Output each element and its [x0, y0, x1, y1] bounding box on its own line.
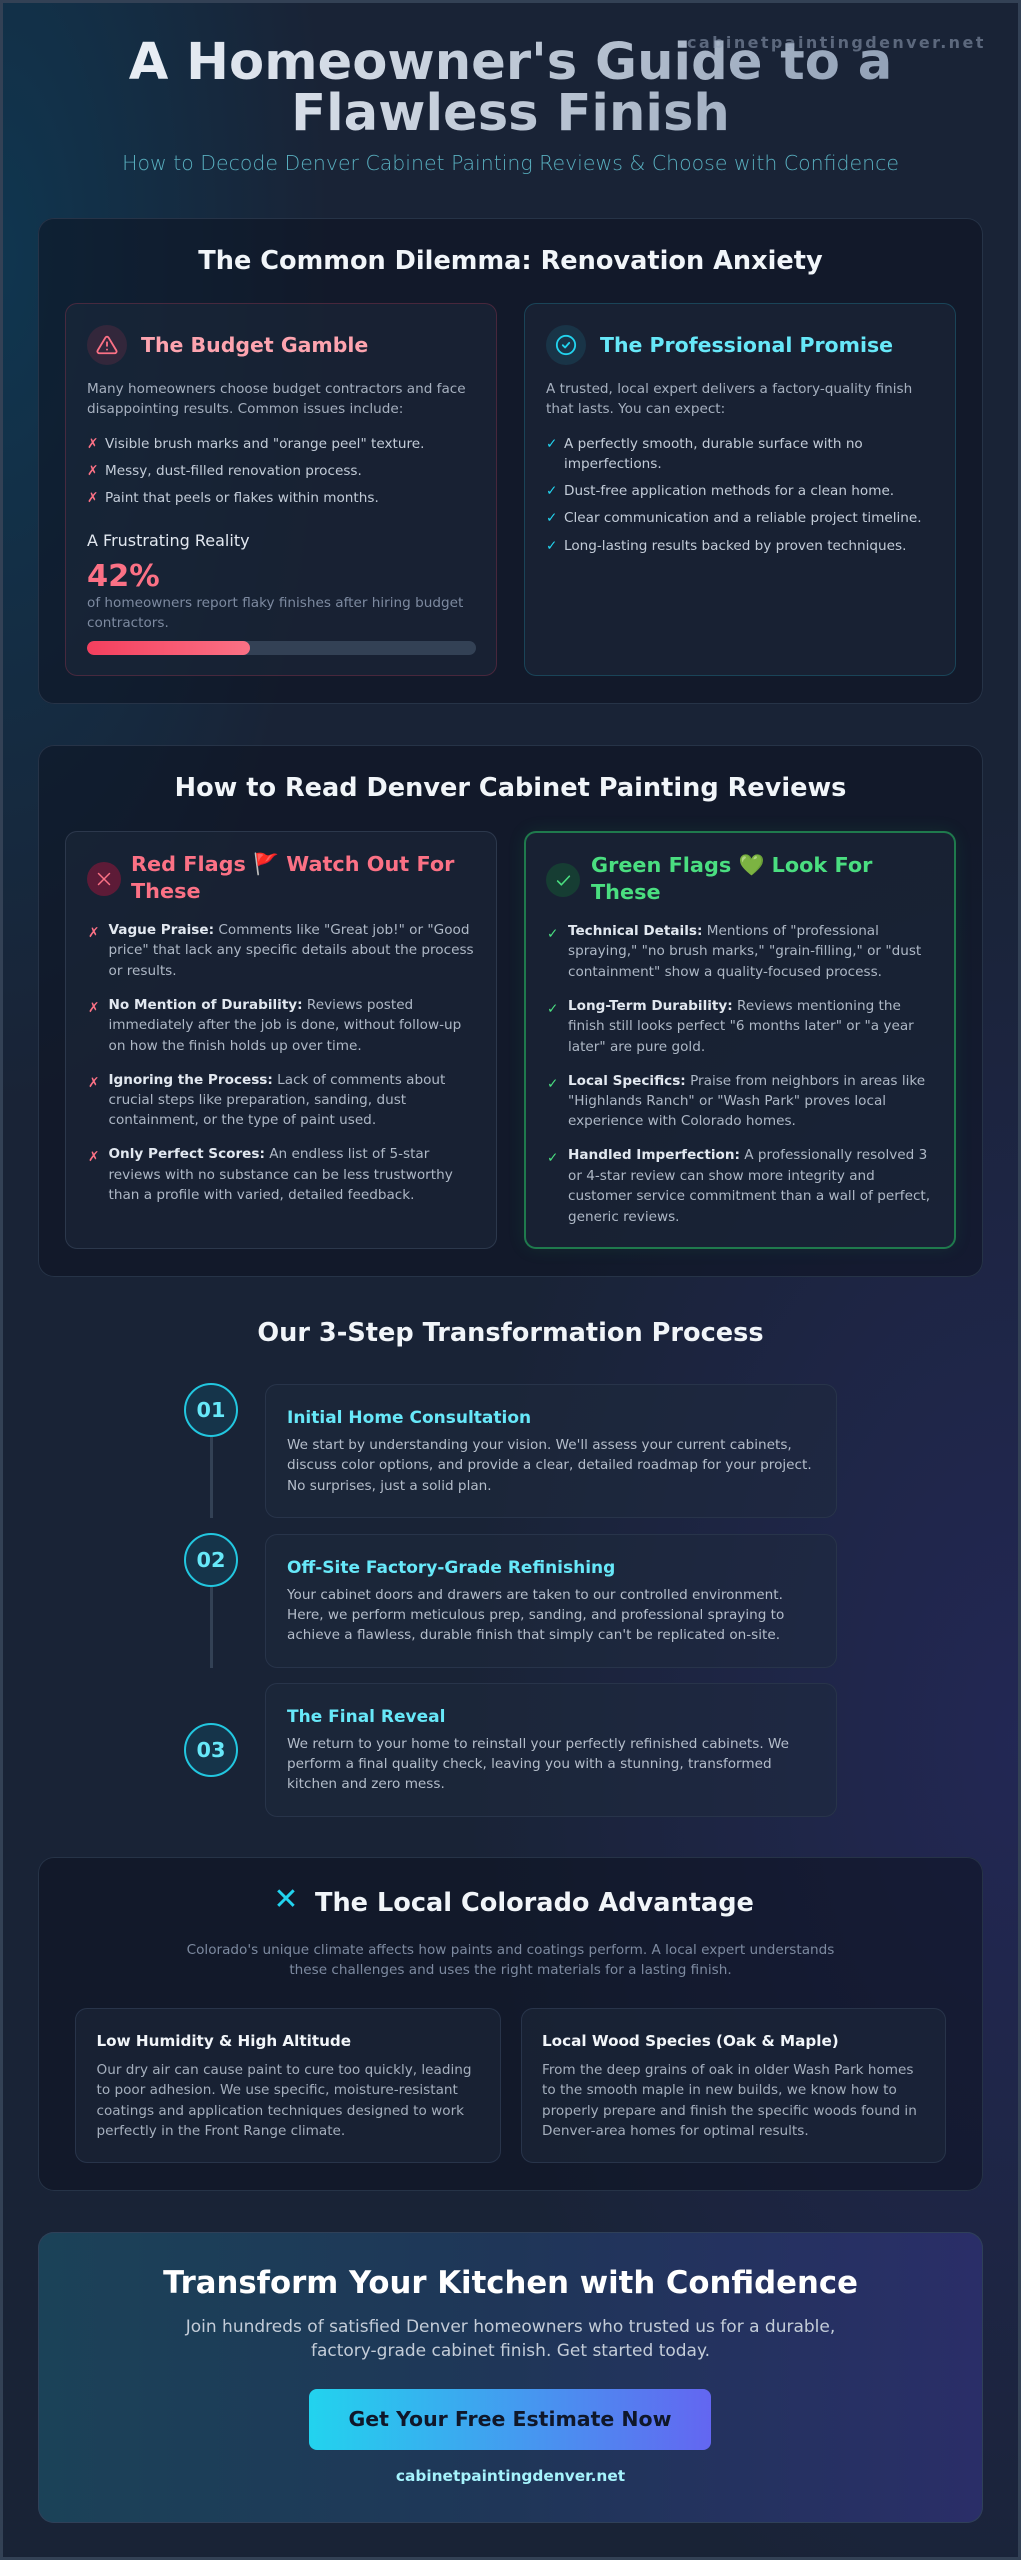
- cta text: Join hundreds of satisfied Denver homeowners who trusted us for a durable,: [186, 2317, 835, 2337]
- stat description: of homeowners report flaky finishes after hiring budget: [87, 595, 463, 611]
- stat description: contractors.: [87, 615, 169, 631]
- website url: cabinetpaintingdenver.net: [396, 2467, 625, 2485]
- step title: Off-Site Factory-Grade Refinishing: [287, 1558, 615, 1578]
- red flag list: containment, or the type of paint used.: [108, 1112, 376, 1128]
- green flag list: later" are pure gold.: [568, 1039, 705, 1055]
- intro text: Many homeowners choose budget contractors and face: [87, 381, 466, 397]
- header: [122, 32, 986, 175]
- panel: call to action: [38, 2232, 983, 2523]
- cta text: factory-grade cabinet finish. Get started today.: [311, 2341, 710, 2361]
- number 01: [184, 1383, 238, 1437]
- benefit list: ✓: [546, 538, 557, 554]
- red flag list: Vague Praise: Comments like "Great job!" or "Good: [108, 922, 469, 938]
- red flag list: No Mention of Durability: Reviews posted: [108, 997, 413, 1013]
- progress bar 42%: [87, 641, 476, 655]
- benefit list: [546, 436, 922, 554]
- red flag list: price" that lack any specific details about the process: [108, 942, 474, 958]
- cta text: [184, 2317, 835, 2361]
- red flag list: or results.: [108, 963, 177, 979]
- red flag list: ✗: [88, 1000, 99, 1016]
- card title: Green Flags 💚 Look For: [591, 853, 872, 877]
- panel: how to read reviews: [38, 745, 983, 1277]
- description: Colorado's unique climate affects how paints and coatings perform. A local expert understands: [187, 1942, 834, 1958]
- red flag list: ✗: [88, 925, 99, 941]
- green flag list: ✓: [547, 1150, 558, 1166]
- card text: properly prepare and finish the specific woods found in: [542, 2103, 917, 2119]
- card: green flags: [524, 831, 956, 1249]
- cta heading: Transform Your Kitchen with Confidence: [163, 2265, 858, 2301]
- stat label: A Frustrating Reality: [87, 531, 250, 550]
- card: the professional promise: [524, 303, 956, 676]
- intro text: disappointing results. Common issues include:: [87, 401, 403, 417]
- green flag list: Long-Term Durability: Reviews mentioning the: [568, 998, 901, 1014]
- benefit list: Long-lasting results backed by proven techniques.: [564, 538, 906, 554]
- step text: [287, 1736, 789, 1792]
- green flag list: "Highlands Ranch" or "Wash Park" proves local: [568, 1093, 886, 1109]
- step text: [287, 1437, 812, 1494]
- card title: The Budget Gamble: [141, 333, 368, 357]
- card text: Our dry air can cause paint to cure too quickly, leading: [96, 2062, 472, 2078]
- cta button: [309, 2389, 711, 2450]
- red flag list: reviews with no substance can be less trustworthy: [108, 1167, 453, 1183]
- step card: [265, 1682, 837, 1816]
- stat: 42%: 42%: [87, 559, 160, 594]
- green flag list: [547, 923, 930, 1225]
- benefit list: ✓: [546, 510, 557, 526]
- intro text: [546, 381, 912, 417]
- green flag list: ✓: [547, 926, 558, 942]
- step title: Initial Home Consultation: [287, 1408, 531, 1428]
- step text: kitchen and zero mess.: [287, 1776, 445, 1792]
- issue list: Messy, dust-filled renovation process.: [105, 463, 362, 479]
- green flag list: ✓: [547, 1076, 558, 1092]
- card title: [131, 852, 454, 903]
- step text: Here, we perform meticulous prep, sanding, and professional spraying to: [287, 1607, 784, 1623]
- description: [187, 1942, 834, 1978]
- green flag list: containment" show a quality-focused process.: [568, 964, 882, 980]
- issue list: ✗: [87, 436, 98, 452]
- green flag list: finish still looks perfect "6 months later" or "a year: [568, 1018, 914, 1034]
- step title: The Final Reveal: [287, 1706, 445, 1726]
- intro text: [87, 381, 466, 417]
- step text: No surprises, just a solid plan.: [287, 1478, 492, 1494]
- step card: [265, 1534, 837, 1668]
- icon: warning triangle: [87, 325, 127, 365]
- title: A Homeowner's Guide to a: [129, 32, 892, 92]
- step 2: [184, 1533, 837, 1668]
- benefit list: ✓: [546, 436, 557, 452]
- red flag list: [88, 922, 474, 1203]
- card title: Local Wood Species (Oak & Maple): [542, 2032, 839, 2050]
- red flag list: Only Perfect Scores: An endless list of 5-star: [108, 1146, 429, 1162]
- card title: [591, 853, 872, 904]
- title: Flawless Finish: [291, 83, 730, 143]
- step text: Your cabinet doors and drawers are taken to our controlled environment.: [287, 1586, 783, 1602]
- issue list: ✗: [87, 490, 98, 506]
- issue list: [87, 436, 424, 506]
- heading: process: Our 3-Step Transformation Process: [257, 1318, 764, 1348]
- card: wood species: [520, 2008, 946, 2163]
- heading: The Common Dilemma: Renovation Anxiety: [198, 246, 823, 276]
- card text: [542, 2062, 917, 2139]
- step text: perform a final quality check, leaving you with a stunning, transformed: [287, 1756, 772, 1772]
- step text: achieve a flawless, durable finish that simply can't be replicated on-site.: [287, 1627, 780, 1643]
- number 03: [184, 1722, 238, 1776]
- number 02: [184, 1532, 238, 1586]
- red flag list: ✗: [88, 1149, 99, 1165]
- panel: local colorado advantage: [38, 1857, 983, 2191]
- green flag list: ✓: [547, 1001, 558, 1017]
- benefit list: A perfectly smooth, durable surface with no: [564, 436, 863, 452]
- stat description: [87, 595, 463, 631]
- icon: red x: [87, 862, 121, 896]
- green flag list: Technical Details: Mentions of "professional: [568, 923, 879, 939]
- issue list: ✗: [87, 463, 98, 479]
- number 02: 02: [197, 1548, 225, 1572]
- green flag list: Handled Imperfection: A professionally resolved 3: [568, 1147, 927, 1163]
- title: [0, 37, 1021, 139]
- card text: From the deep grains of oak in older Wash Park homes: [542, 2062, 914, 2078]
- green flag list: Local Specifics: Praise from neighbors in areas like: [568, 1073, 925, 1089]
- panel: the common dilemma: [38, 218, 983, 704]
- process timeline: [184, 1383, 837, 1817]
- heading: The Local Colorado Advantage: [315, 1888, 754, 1918]
- issue list: Paint that peels or flakes within months.: [105, 490, 379, 506]
- red flag list: immediately after the job is done, without follow-up: [108, 1017, 461, 1033]
- card text: perfectly in the Front Range climate.: [96, 2123, 345, 2139]
- card title: Red Flags 🚩 Watch Out For: [131, 852, 454, 876]
- number 01: 01: [197, 1398, 225, 1422]
- benefit list: Dust-free application methods for a clean home.: [564, 483, 894, 499]
- icon: cross tools: ✕: [273, 1882, 299, 1917]
- red flag list: than a profile with varied, detailed feedback.: [108, 1187, 414, 1203]
- watermark url: cabinetpaintingdenver.net: [687, 33, 986, 52]
- step 1: [184, 1383, 837, 1518]
- step text: discuss color options, and provide a clear, detailed roadmap for your project.: [287, 1457, 812, 1473]
- description: these challenges and uses the right materials for a lasting finish.: [289, 1962, 732, 1978]
- connector: [210, 1586, 213, 1668]
- benefit list: Clear communication and a reliable project timeline.: [564, 510, 922, 526]
- card title: Low Humidity & High Altitude: [96, 2032, 351, 2050]
- card title: These: [131, 879, 201, 903]
- green flag list: spraying," "no brush marks," "grain-filling," or "dust: [568, 943, 921, 959]
- intro text: A trusted, local expert delivers a factory-quality finish: [546, 381, 912, 397]
- icon: circle check: [546, 325, 586, 365]
- red flag list: crucial steps like preparation, sanding, dust: [108, 1092, 406, 1108]
- red flag list: ✗: [88, 1075, 99, 1091]
- card text: Denver-area homes for optimal results.: [542, 2123, 809, 2139]
- card text: to poor adhesion. We use specific, moisture-resistant: [96, 2082, 458, 2098]
- heading: How to Read Denver Cabinet Painting Reviews: [175, 773, 846, 803]
- card text: [96, 2062, 472, 2139]
- card title: The Professional Promise: [600, 333, 893, 357]
- step 3: [184, 1683, 837, 1817]
- cta button: Get Your Free Estimate Now: [348, 2407, 672, 2431]
- green flag list: or 4-star review can show more integrity and: [568, 1168, 875, 1184]
- subtitle: How to Decode Denver Cabinet Painting Reviews & Choose with Confidence: [122, 151, 899, 175]
- number 03: 03: [197, 1738, 225, 1762]
- step text: [287, 1586, 784, 1643]
- card: humidity: [75, 2008, 500, 2163]
- icon: green check: [546, 863, 580, 897]
- step text: We start by understanding your vision. We'll assess your current cabinets,: [287, 1437, 792, 1453]
- intro text: that lasts. You can expect:: [546, 401, 725, 417]
- card: the budget gamble: [65, 303, 497, 676]
- card text: coatings and application techniques designed to work: [96, 2103, 464, 2119]
- red flag list: Ignoring the Process: Lack of comments about: [108, 1072, 445, 1088]
- red flag list: on how the finish holds up over time.: [108, 1038, 362, 1054]
- card: red flags: [65, 831, 497, 1249]
- issue list: Visible brush marks and "orange peel" texture.: [105, 436, 424, 452]
- step card: [265, 1384, 837, 1518]
- step text: We return to your home to reinstall your perfectly refinished cabinets. We: [287, 1736, 789, 1752]
- benefit list: ✓: [546, 483, 557, 499]
- card text: to the smooth maple in new builds, we know how to: [542, 2082, 897, 2098]
- benefit list: imperfections.: [564, 456, 662, 472]
- connector: [210, 1437, 213, 1518]
- green flag list: experience with Colorado homes.: [568, 1113, 796, 1129]
- card title: These: [591, 880, 661, 904]
- green flag list: customer service commitment than a wall of perfect,: [568, 1188, 930, 1204]
- green flag list: generic reviews.: [568, 1209, 680, 1225]
